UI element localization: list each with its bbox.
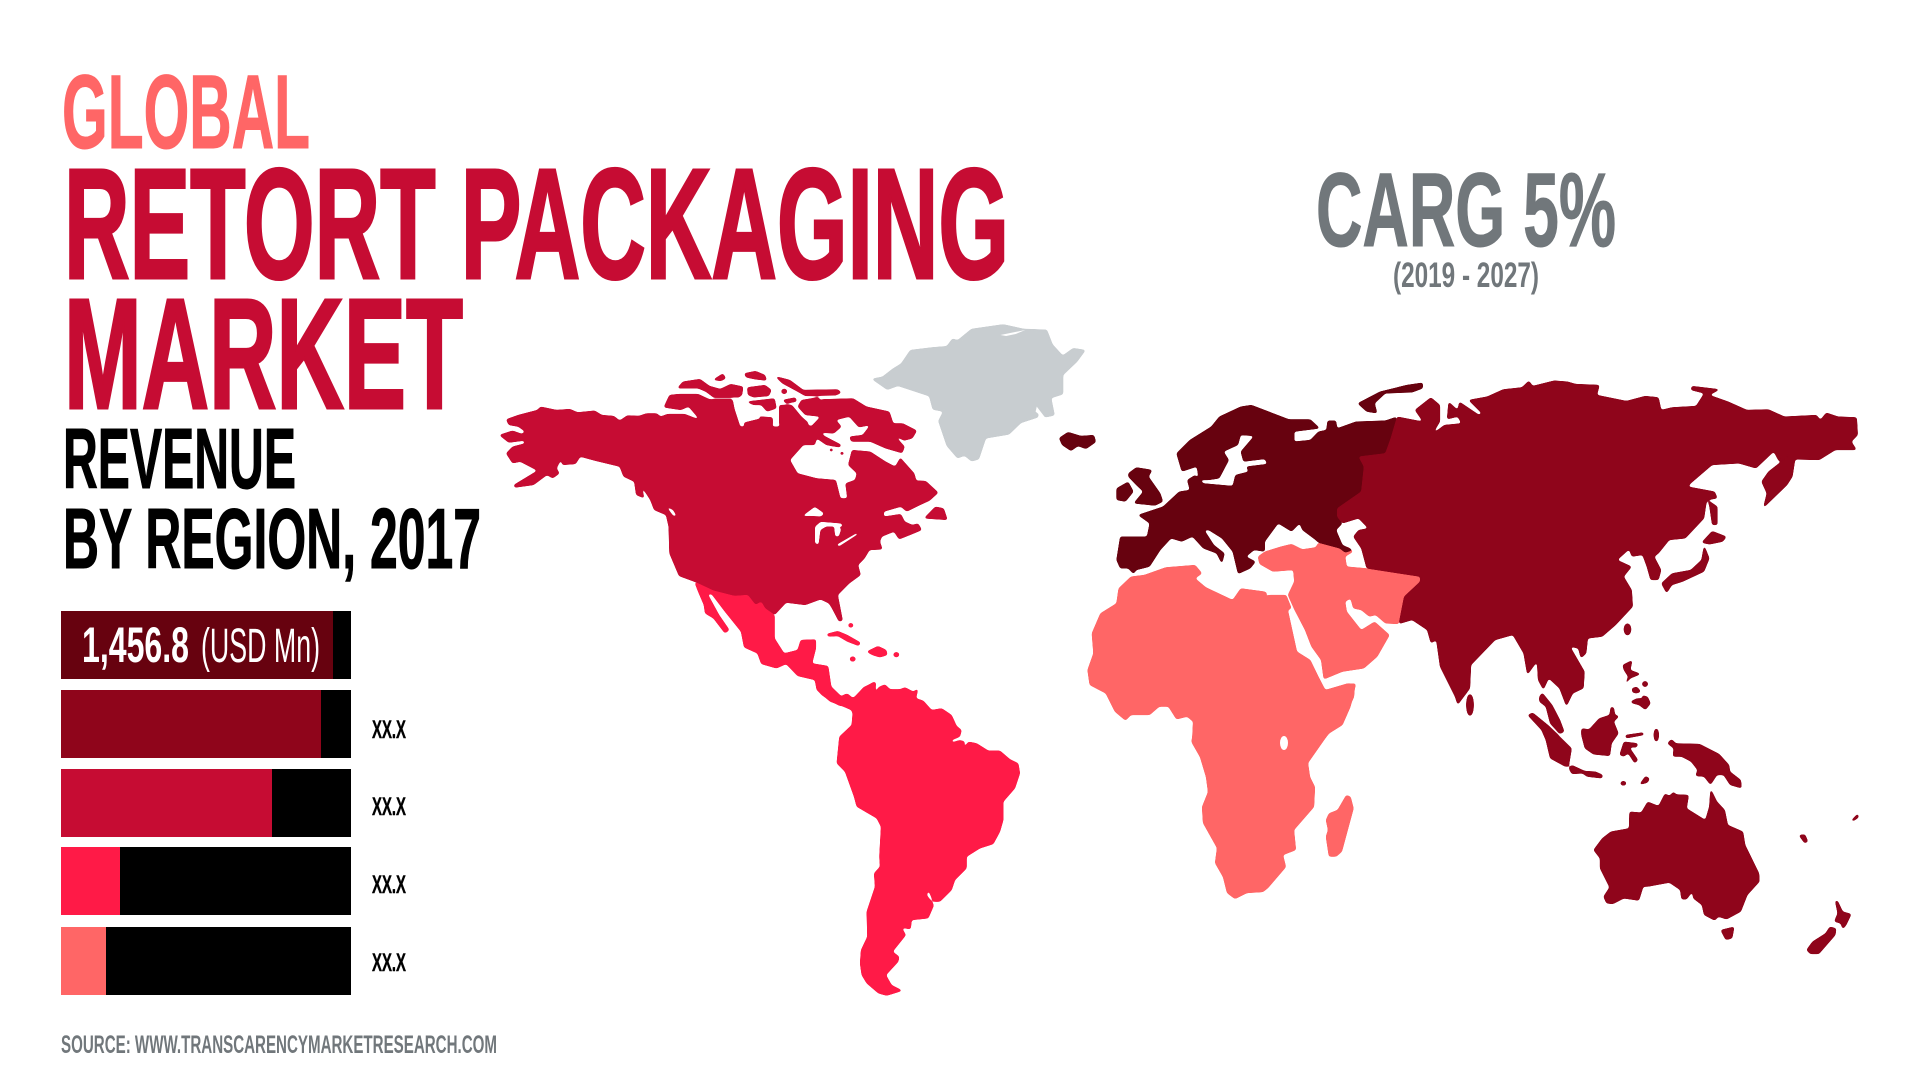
CAGR period: (2019 - 2027) (1393, 256, 1539, 295)
subtitle: BY REGION, 2017: BY REGION, 2017 (63, 492, 481, 587)
title: MARKET: MARKET (64, 267, 463, 442)
source line: SOURCE: WWW.TRANSCARENCYMARKETRESEARCH.COM (61, 1031, 497, 1059)
bar: Europe (61, 611, 351, 679)
bar label: XX.X (372, 871, 406, 899)
bar: Middle East and Africa (61, 927, 351, 995)
bar: Asia Pacific (61, 690, 351, 758)
map: Latin America (694, 582, 1020, 996)
title: RETORT PACKAGING: RETORT PACKAGING (64, 137, 1009, 312)
bar label: XX.X (372, 716, 406, 744)
map: North America (499, 371, 948, 622)
bar: Europe: 1,456.8 (82, 617, 189, 673)
map: Greenland (872, 325, 1085, 461)
map: Asia Pacific (1337, 381, 1859, 954)
CAGR value: CARG 5% (1316, 152, 1616, 269)
map: Africa (1087, 565, 1356, 899)
map: Middle East (1258, 543, 1420, 679)
bar label: XX.X (372, 793, 406, 821)
bar: Europe: (USD Mn) (201, 620, 320, 673)
bar: Latin America (61, 847, 351, 915)
bar: North America (61, 769, 351, 837)
map: Europe (1059, 383, 1423, 574)
world map (499, 325, 1859, 996)
title: GLOBAL: GLOBAL (62, 54, 310, 171)
bar label: XX.X (372, 949, 406, 977)
bar chart: revenue by region (61, 611, 406, 995)
subtitle: REVENUE: REVENUE (63, 412, 296, 507)
